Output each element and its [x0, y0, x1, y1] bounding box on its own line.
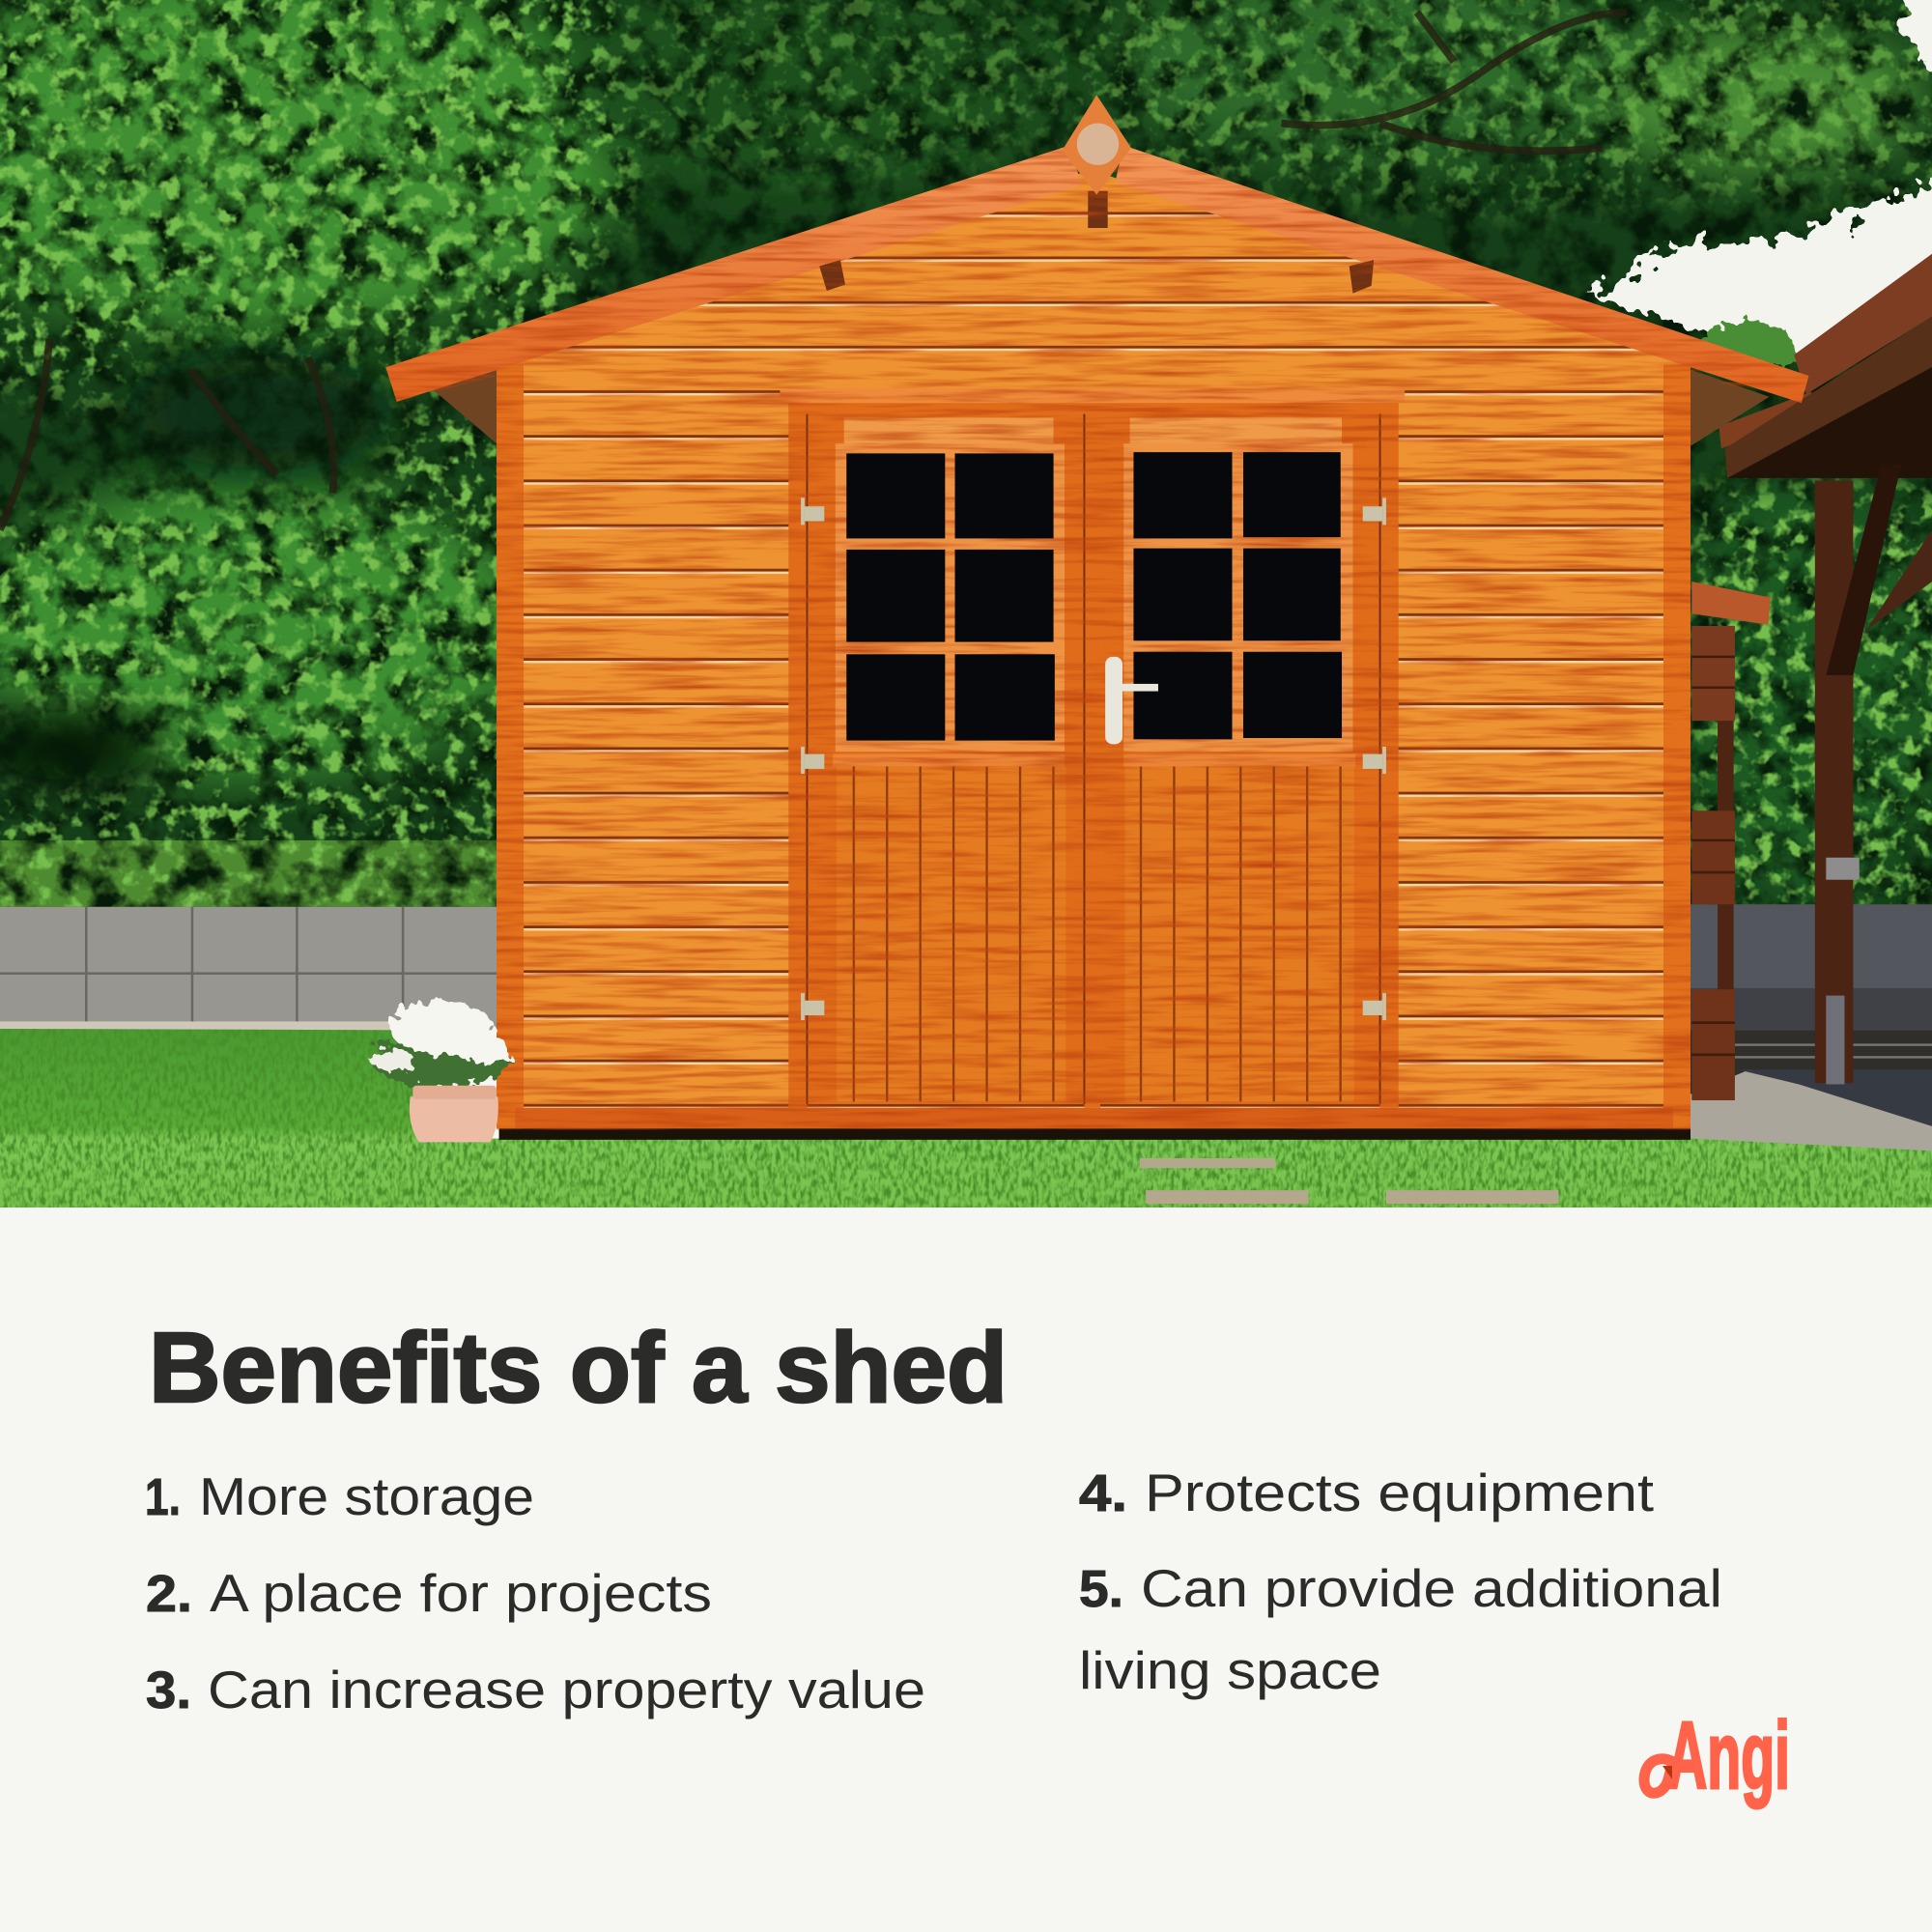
list item 5: living space — [1079, 1640, 1381, 1700]
left door window panes — [846, 453, 1055, 741]
wood grain overlay — [370, 86, 1824, 1133]
trees and foliage backdrop — [0, 0, 1932, 912]
door header — [780, 388, 1405, 403]
shed — [370, 86, 1824, 1140]
list item 5 — [1079, 1558, 1722, 1700]
door edge shadow lines — [807, 414, 1380, 1104]
list item 4: 4. — [1079, 1464, 1127, 1522]
roof purlin blocks — [819, 191, 1374, 294]
Angi logo — [1644, 1702, 1790, 1808]
pergola on the right — [1719, 254, 1932, 1084]
lawn — [0, 1029, 1932, 1208]
dark gap under the shed — [499, 1127, 1690, 1140]
base board — [515, 1108, 1673, 1128]
garden wall, left — [0, 907, 499, 1030]
garden wall, right — [1690, 904, 1932, 1104]
stepping stones — [1140, 1158, 1559, 1204]
door handle — [1105, 657, 1158, 744]
right roof board — [1115, 146, 1808, 403]
door frame — [788, 403, 1399, 1108]
hedge — [0, 840, 499, 907]
list item 3: 3. — [146, 1662, 191, 1719]
title: Benefits of a shed — [149, 1312, 1008, 1423]
right door window panes — [1133, 452, 1342, 739]
list item 1: More storage — [199, 1466, 534, 1526]
tree branches — [0, 13, 1627, 529]
list item 4: Protects equipment — [1145, 1463, 1654, 1522]
finial disc — [1077, 124, 1119, 165]
list item 1: 1. — [145, 1468, 181, 1526]
gravel and path, right — [1676, 1069, 1932, 1164]
small bush behind roof — [1694, 318, 1799, 370]
list item 2: A place for projects — [210, 1563, 712, 1623]
page background panel — [0, 1208, 1932, 1932]
Angi logo: Angi — [1667, 1702, 1790, 1808]
flower pot with white flowers — [370, 1001, 510, 1142]
list item 2: 2. — [146, 1565, 192, 1623]
lit leaf clusters — [0, 0, 1932, 912]
list item 5: Can provide additional — [1141, 1558, 1722, 1618]
photo: wooden shed in a garden — [0, 0, 1932, 1208]
left door — [807, 414, 1084, 1104]
shed gable and plank walls — [497, 170, 1690, 1127]
list item 3: Can increase property value — [208, 1660, 925, 1719]
right door — [1100, 414, 1380, 1104]
corner posts — [497, 365, 1690, 1128]
list item 5: 5. — [1079, 1560, 1123, 1618]
side storage lean-to — [1691, 582, 1771, 1100]
left roof board — [385, 146, 1082, 402]
door hinges — [801, 497, 1386, 1020]
sky gaps — [1589, 0, 1932, 370]
roof peak finial — [1062, 95, 1131, 195]
eave soffits — [433, 367, 1770, 446]
